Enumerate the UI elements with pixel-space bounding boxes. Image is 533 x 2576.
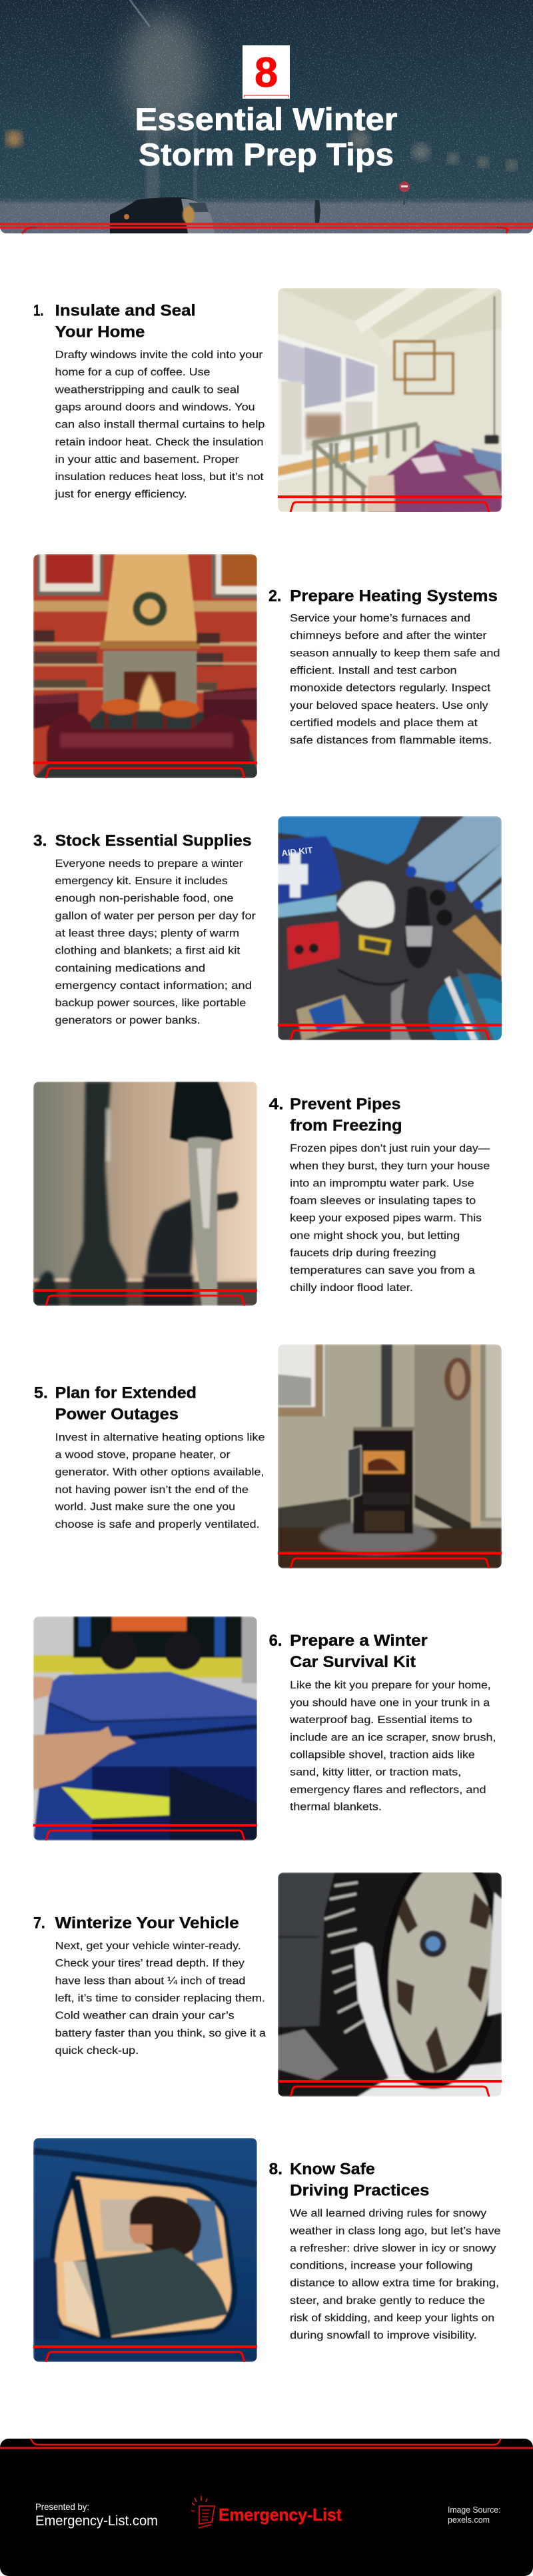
heading: Stock Essential Supplies [55, 832, 252, 850]
panel: tip 6 car survival kit [33, 1616, 496, 1840]
heading: Power Outages [55, 1406, 179, 1424]
photo: emergency kit items: AID KIT [281, 845, 313, 858]
body text: season annually to keep them safe and [290, 648, 500, 659]
heading [269, 1095, 402, 1135]
panel: tip 7 winterize vehicle [33, 1872, 502, 2097]
body text: world. Just make sure the one you [55, 1502, 235, 1513]
body text: emergency contact information; and [55, 980, 252, 992]
presented by: Emergency-List.com [35, 2513, 158, 2529]
body text: efficient. Install and test carbon [290, 666, 457, 676]
body text: Cold weather can drain your car’s [55, 2010, 235, 2022]
body text: certified models and place them at [290, 718, 478, 729]
heading: Plan for Extended [55, 1384, 197, 1402]
body text: your beloved space heaters. Use only [290, 700, 488, 712]
heading: Your Home [55, 323, 145, 341]
body text [55, 858, 256, 1026]
body text: waterproof bag. Essential items to [289, 1714, 472, 1726]
body text: collapsible shovel, traction aids like [290, 1749, 475, 1760]
body text: keep your exposed pipes warm. This [290, 1212, 482, 1224]
body text: Check your tires’ tread depth. If they [55, 1958, 245, 1969]
heading: Driving Practices [290, 2182, 429, 2199]
body text: backup power sources, like portable [55, 998, 246, 1009]
heading: 7. [33, 1914, 45, 1933]
body text: weather in class long ago, but let’s have [289, 2226, 501, 2237]
body text: Next, get your vehicle winter-ready. [55, 1941, 241, 1952]
body text: left, it’s time to consider replacing them. [55, 1993, 265, 2005]
number badge [243, 45, 290, 99]
panel: tip 2 heating systems [33, 554, 500, 778]
body text: choose is safe and properly ventilated. [55, 1519, 260, 1530]
heading: Know Safe [290, 2161, 375, 2178]
body text: Service your home’s furnaces and [290, 613, 470, 624]
body text: just for energy efficiency. [55, 489, 187, 500]
car [110, 197, 215, 233]
panel: tip 5 power outages [34, 1344, 502, 1568]
body text [55, 1941, 266, 2057]
body text: thermal blankets. [290, 1802, 382, 1813]
icon: emergency list [191, 2496, 215, 2528]
body text: in your attic and basement. Proper [55, 454, 239, 465]
body text: chilly indoor flood later. [290, 1282, 413, 1294]
heading [269, 2161, 429, 2199]
number badge: 8 [255, 49, 278, 96]
photo: wood stove [278, 1344, 502, 1568]
body text: Drafty windows invite the cold into your [55, 349, 263, 361]
heading: Prepare Heating Systems [290, 587, 498, 605]
logo: Emergency-List [219, 2505, 342, 2525]
body text: Invest in alternative heating options like [55, 1432, 265, 1443]
body text: one might shock you, but letting [290, 1230, 460, 1242]
panel: tip 3 essential supplies [33, 816, 502, 1040]
body text [55, 349, 265, 500]
body text: steer, and brake gently to reduce the [290, 2295, 485, 2307]
body text: generators or power banks. [55, 1015, 201, 1026]
hero banner [0, 0, 533, 233]
body text: safe distances from flammable items. [290, 735, 492, 746]
panel: tip 1 insulate and seal [33, 288, 502, 515]
body text [289, 1143, 490, 1294]
heading: 5. [34, 1384, 48, 1402]
body text: gaps around doors and windows. You [55, 401, 255, 413]
body text: include are an ice scraper, snow brush, [290, 1732, 496, 1743]
body text: when they burst, they turn your house [289, 1160, 490, 1172]
heading: 1. [33, 301, 43, 320]
body text: enough non-perishable food, one [55, 893, 234, 904]
body text: conditions, increase your following [290, 2261, 472, 2271]
body text: Like the kit you prepare for your home, [290, 1680, 491, 1691]
body text: monoxide detectors regularly. Inspect [290, 683, 491, 694]
body text: can also install thermal curtains to help [55, 419, 265, 431]
heading: 4. [269, 1095, 284, 1114]
stop sign [399, 181, 410, 205]
heading: Prevent Pipes [290, 1095, 401, 1114]
body text: risk of skidding, and keep your lights on [290, 2313, 494, 2324]
photo: frozen faucet [33, 1082, 257, 1306]
heading: from Freezing [290, 1116, 402, 1135]
heading: 3. [33, 832, 47, 850]
body text: have less than about ¼ inch of tread [55, 1975, 245, 1987]
image source: Image Source: [448, 2505, 501, 2515]
body text: emergency flares and reflectors, and [290, 1784, 486, 1796]
heading: 8. [269, 2161, 282, 2178]
body text: insulation reduces heat loss, but it’s not [55, 471, 264, 483]
heading [269, 1632, 428, 1671]
photo: bedroom loft [278, 288, 502, 515]
heading: Insulate and Seal [55, 301, 196, 320]
body text: at least three days; plenty of warm [55, 928, 239, 939]
image source: pexels.com [448, 2515, 490, 2525]
title: Storm Prep Tips [139, 137, 394, 172]
body text: foam sleeves or insulating tapes to [290, 1195, 476, 1207]
body text: quick check-up. [55, 2045, 139, 2057]
body text [289, 1680, 496, 1813]
panel: tip 4 pipes [33, 1082, 490, 1306]
body text: chimneys before and after the winter [290, 630, 487, 641]
image source [448, 2505, 501, 2525]
body text: sand, kitty litter, or traction mats, [290, 1767, 461, 1778]
body text [290, 613, 500, 746]
body text: during snowfall to improve visibility. [290, 2330, 477, 2341]
body text: generator. With other options available, [55, 1467, 264, 1478]
title [135, 101, 397, 172]
photo: fireplace lounge [33, 554, 260, 778]
body text: We all learned driving rules for snowy [290, 2208, 486, 2219]
body text: emergency kit. Ensure it includes [55, 876, 228, 887]
body text [55, 1432, 265, 1530]
presented by: Presented by: [35, 2501, 89, 2512]
body text: you should have one in your trunk in a [290, 1697, 490, 1708]
body text: a refresher: drive slower in icy or snowy [290, 2243, 496, 2254]
pedestrian [314, 200, 320, 223]
body text: not having power isn’t the end of the [55, 1484, 249, 1496]
body text: distance to allow extra time for braking, [290, 2278, 499, 2289]
body text: weatherstripping and caulk to seal [55, 384, 239, 396]
presented by [35, 2501, 158, 2529]
logo [191, 2496, 342, 2528]
heading: Winterize Your Vehicle [55, 1914, 239, 1933]
heading [34, 1384, 197, 1424]
panel: tip 8 safe driving [33, 2138, 501, 2362]
body text: clothing and blankets; a first aid kit [55, 946, 241, 956]
title: Essential Winter [135, 101, 397, 137]
body text: home for a cup of coffee. Use [55, 367, 210, 378]
body text: into an impromptu water park. Use [290, 1178, 474, 1190]
heading [33, 301, 196, 341]
body text [289, 2208, 501, 2341]
body text: Everyone needs to prepare a winter [55, 858, 243, 870]
heading: Prepare a Winter [290, 1632, 428, 1650]
footer [0, 2439, 533, 2576]
body text: retain indoor heat. Check the insulation [55, 437, 263, 448]
body text: battery faster than you think, so give it a [55, 2028, 266, 2039]
body text: containing medications and [55, 963, 205, 974]
photo: driver in blue truck [33, 2138, 257, 2362]
body text: faucets drip during freezing [290, 1248, 436, 1259]
photo: emergency kit items [278, 816, 502, 1040]
body text: Frozen pipes don’t just ruin your day— [290, 1143, 490, 1154]
heading: Car Survival Kit [290, 1653, 416, 1671]
photo: blue survival bag [33, 1616, 257, 1840]
heading: 6. [269, 1632, 282, 1650]
body text: gallon of water per person per day for [55, 911, 256, 922]
body text: temperatures can save you from a [290, 1265, 475, 1276]
heading: 2. [268, 587, 281, 605]
body text: a wood stove, propane heater, or [55, 1450, 230, 1461]
photo: snowy tire [278, 1872, 502, 2097]
